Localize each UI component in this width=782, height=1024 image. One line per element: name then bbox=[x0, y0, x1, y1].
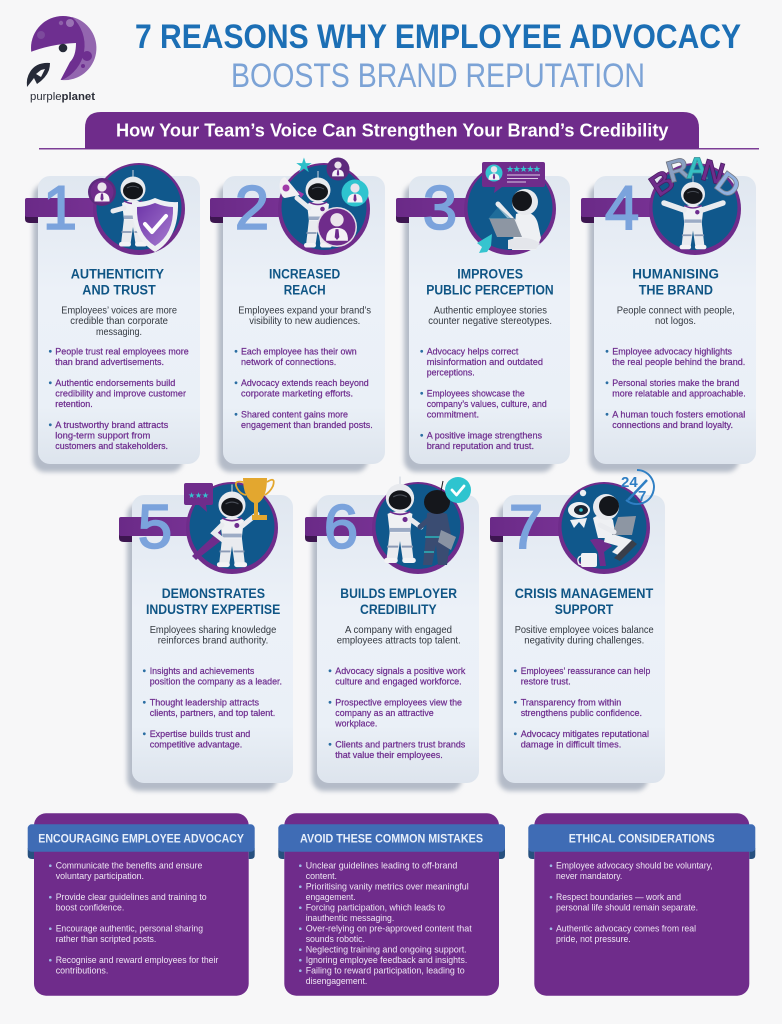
bullet list: Expertise builds trust and bbox=[150, 728, 250, 739]
logo: purpleplanet: purpleplanet bbox=[30, 91, 95, 103]
description: negativity during challenges. bbox=[524, 636, 644, 646]
bullet list: that value their employees. bbox=[335, 749, 443, 760]
heading: BUILDS EMPLOYER bbox=[340, 586, 457, 601]
heading: REACH bbox=[284, 282, 326, 297]
icon: astronaut with laptop and review bubble: ★★★★★ bbox=[506, 164, 541, 174]
heading: AND TRUST bbox=[82, 282, 157, 297]
icon: astronaut with laptop, robot and 24/7: 24 bbox=[621, 474, 638, 491]
bullet list: boost confidence. bbox=[56, 902, 124, 913]
panel: avoid these common mistakes bbox=[278, 813, 505, 996]
bullet list: Failing to reward participation, leading to bbox=[306, 965, 465, 976]
bullet list bbox=[514, 665, 650, 749]
description: messaging. bbox=[96, 327, 142, 338]
bullet list: Communicate the benefits and ensure bbox=[56, 860, 202, 871]
bullet list bbox=[235, 345, 373, 430]
number 5: 5 bbox=[138, 493, 172, 562]
title: BOOSTS BRAND REPUTATION bbox=[231, 57, 645, 95]
heading bbox=[426, 266, 554, 297]
bullet list: Thought leadership attracts bbox=[150, 696, 259, 707]
description: Positive employee voices balance bbox=[515, 625, 654, 636]
bullet list bbox=[299, 860, 472, 986]
icon: astronaut with BRAND letters: D bbox=[709, 164, 747, 206]
bullet list: sounds robotic. bbox=[306, 933, 365, 944]
icon: astronaut with laptop and review bubble bbox=[477, 162, 545, 253]
bullet list: Employees showcase the bbox=[427, 387, 525, 398]
bullet list: inauthentic messaging. bbox=[306, 912, 394, 923]
bullet list: competitive advantage. bbox=[150, 738, 242, 749]
bullet list: network of connections. bbox=[241, 356, 336, 367]
heading: INDUSTRY EXPERTISE bbox=[146, 602, 280, 617]
bullet list: than brand advertisements. bbox=[55, 356, 164, 367]
heading bbox=[71, 266, 164, 297]
heading: PUBLIC PERCEPTION bbox=[426, 282, 554, 297]
bullet list: commitment. bbox=[427, 408, 479, 419]
bullet list: Each employee has their own bbox=[241, 345, 357, 356]
bullet list: workplace. bbox=[334, 717, 377, 728]
icon: astronaut with BRAND letters: A bbox=[686, 150, 708, 186]
bullet list: People trust real employees more bbox=[55, 345, 189, 356]
heading bbox=[269, 266, 341, 297]
description: credible than corporate bbox=[70, 316, 168, 327]
number 3: 3 bbox=[423, 174, 457, 243]
heading: CREDIBILITY bbox=[360, 602, 437, 617]
heading: INCREASED bbox=[269, 266, 341, 282]
bullet list: Authentic endorsements build bbox=[55, 377, 175, 388]
bullet list: perceptions. bbox=[427, 366, 475, 377]
heading: HUMANISING bbox=[632, 266, 719, 282]
heading: IMPROVES bbox=[457, 266, 523, 282]
bullet list bbox=[420, 345, 547, 451]
bullet list: Employees’ reassurance can help bbox=[521, 665, 650, 676]
bullet list: company as an attractive bbox=[335, 707, 434, 718]
description: not logos. bbox=[655, 316, 696, 327]
bullet list: the real people behind the brand. bbox=[612, 356, 745, 367]
icon: astronaut with BRAND letters: N bbox=[697, 152, 729, 192]
panel: reason 3 improves public perception bbox=[396, 162, 570, 472]
bullet list bbox=[329, 665, 466, 760]
panel: ethical considerations bbox=[528, 813, 755, 996]
heading: THE BRAND bbox=[639, 282, 713, 297]
icon: astronaut shaking hands with robot bbox=[384, 477, 471, 565]
heading bbox=[146, 586, 280, 617]
icon: astronaut with laptop, robot and 24/7 bbox=[568, 470, 654, 567]
subtitle banner: How Your Team’s Voice Can Strengthen Your Brand’s Credibility bbox=[116, 120, 668, 140]
bullet list: Ignoring employee feedback and insights. bbox=[306, 954, 467, 965]
bullet list: Authentic advocacy comes from real bbox=[556, 923, 696, 934]
description bbox=[428, 305, 552, 327]
bullet list: engagement. bbox=[306, 891, 356, 902]
logo: purpleplanet bbox=[27, 16, 96, 103]
description: reinforces brand authority. bbox=[158, 636, 268, 646]
number 6: 6 bbox=[324, 493, 358, 562]
bullet list: personal life should remain separate. bbox=[556, 902, 698, 913]
bullet list: Advocacy mitigates reputational bbox=[521, 728, 649, 739]
bullet list: credibility and improve customer bbox=[55, 387, 186, 398]
panel: reason 4 humanising the brand bbox=[581, 150, 756, 472]
bullet list: Employee advocacy should be voluntary, bbox=[556, 860, 713, 871]
bullet list: pride, not pressure. bbox=[556, 933, 631, 944]
heading: DEMONSTRATES bbox=[162, 586, 265, 601]
description bbox=[515, 625, 654, 646]
heading bbox=[632, 266, 719, 297]
bullet list: Employee advocacy highlights bbox=[612, 345, 732, 356]
bullet list bbox=[143, 665, 282, 749]
bullet list: company’s values, culture, and bbox=[427, 398, 547, 409]
icon: astronaut with megaphone and people bbox=[280, 155, 368, 248]
bullet list: disengagement. bbox=[306, 975, 367, 986]
bullet list: restore trust. bbox=[521, 675, 571, 686]
description: Employees’ voices are more bbox=[61, 305, 177, 316]
bullet list: retention. bbox=[55, 398, 93, 409]
bullet list: Recognise and reward employees for their bbox=[56, 954, 218, 965]
bullet list: Unclear guidelines leading to off-brand bbox=[306, 860, 457, 871]
bullet list: Forcing participation, which leads to bbox=[306, 902, 445, 913]
description bbox=[617, 305, 735, 327]
bullet list: Advocacy extends reach beyond bbox=[241, 377, 369, 388]
bullet list: Respect boundaries — work and bbox=[556, 891, 681, 902]
panel: reason 5 demonstrates industry expertise bbox=[119, 478, 293, 791]
bullet list: Over-relying on pre-approved content that bbox=[306, 923, 472, 934]
bullet list: strengthens public confidence. bbox=[521, 707, 642, 718]
bullet list bbox=[550, 860, 713, 944]
subtitle banner bbox=[39, 112, 759, 150]
bullet list: Shared content gains more bbox=[241, 408, 348, 419]
number 4: 4 bbox=[605, 174, 639, 243]
icon: astronaut with BRAND letters: R bbox=[662, 150, 694, 190]
description bbox=[238, 305, 371, 327]
bullet list: A human touch fosters emotional bbox=[612, 408, 745, 419]
icon: astronaut with shield bbox=[88, 170, 178, 252]
description: employees attracts top talent. bbox=[337, 636, 461, 646]
bullet list: Personal stories make the brand bbox=[612, 377, 739, 388]
bullet list: Clients and partners trust brands bbox=[335, 738, 466, 749]
bullet list bbox=[606, 345, 746, 430]
bullet list: voluntary participation. bbox=[56, 870, 144, 881]
header: ENCOURAGING EMPLOYEE ADVOCACY bbox=[38, 832, 244, 845]
bullet list: A positive image strengthens bbox=[427, 429, 542, 440]
description: visibility to new audiences. bbox=[249, 316, 360, 327]
bullet list: A trustworthy brand attracts bbox=[55, 419, 169, 430]
bullet list: engagement than branded posts. bbox=[241, 419, 373, 430]
heading: SUPPORT bbox=[555, 602, 614, 617]
bullet list: customers and stakeholders. bbox=[55, 440, 168, 451]
description: Employees sharing knowledge bbox=[150, 625, 277, 636]
bullet list: contributions. bbox=[56, 965, 108, 976]
panel: reason 7 crisis management support bbox=[490, 470, 665, 791]
bullet list: Advocacy signals a positive work bbox=[335, 665, 466, 676]
bullet list: Provide clear guidelines and training to bbox=[56, 891, 207, 902]
bullet list: connections and brand loyalty. bbox=[612, 419, 733, 430]
icon: astronaut with trophy bbox=[184, 478, 274, 567]
panel: reason 6 builds employer credibility bbox=[305, 477, 479, 791]
description: A company with engaged bbox=[345, 625, 452, 636]
number 1: 1 bbox=[43, 174, 77, 243]
header: AVOID THESE COMMON MISTAKES bbox=[300, 832, 483, 845]
header: ETHICAL CONSIDERATIONS bbox=[569, 832, 715, 845]
bullet list: Transparency from within bbox=[521, 696, 621, 707]
bullet list: content. bbox=[306, 870, 337, 881]
bullet list: never mandatory. bbox=[556, 870, 622, 881]
title bbox=[135, 18, 741, 95]
bullet list: position the company as a leader. bbox=[150, 675, 282, 686]
description: counter negative stereotypes. bbox=[428, 316, 552, 327]
bullet list: Prioritising vanity metrics over meaningful bbox=[306, 881, 469, 892]
description: People connect with people, bbox=[617, 305, 735, 316]
bullet list: long-term support from bbox=[55, 429, 150, 440]
description bbox=[337, 625, 461, 646]
panel: encouraging employee advocacy bbox=[28, 813, 255, 996]
bullet list: Prospective employees view the bbox=[335, 696, 462, 707]
heading: CRISIS MANAGEMENT bbox=[515, 586, 654, 601]
heading bbox=[340, 586, 457, 617]
heading: AUTHENTICITY bbox=[71, 266, 164, 282]
bullet list: brand reputation and trust. bbox=[427, 440, 534, 451]
bullet list: damage in difficult times. bbox=[521, 738, 621, 749]
number 7: 7 bbox=[509, 493, 543, 562]
icon: astronaut with laptop, robot and 24/7: 7 bbox=[638, 488, 646, 505]
bullet list bbox=[49, 860, 218, 976]
bullet list: culture and engaged workforce. bbox=[335, 675, 462, 686]
bullet list: Advocacy helps correct bbox=[427, 345, 519, 356]
description bbox=[61, 305, 177, 338]
bullet list: Encourage authentic, personal sharing bbox=[56, 923, 203, 934]
icon: astronaut with trophy: ★★★ bbox=[188, 491, 209, 500]
bullet list bbox=[49, 345, 189, 451]
description bbox=[150, 625, 277, 646]
description: Employees expand your brand’s bbox=[238, 305, 371, 316]
bullet list: clients, partners, and top talent. bbox=[150, 707, 275, 718]
panel: reason 1 authenticity and trust bbox=[25, 163, 200, 472]
number 2: 2 bbox=[235, 174, 269, 243]
bullet list: more relatable and approachable. bbox=[612, 387, 746, 398]
heading bbox=[515, 586, 654, 617]
bullet list: Neglecting training and ongoing support. bbox=[306, 944, 467, 955]
bullet list: Insights and achievements bbox=[150, 665, 255, 676]
bullet list: misinformation and outdated bbox=[427, 356, 543, 367]
icon: astronaut with BRAND letters: B bbox=[643, 162, 681, 204]
panel: reason 2 increased reach bbox=[210, 155, 385, 472]
bullet list: corporate marketing efforts. bbox=[241, 387, 353, 398]
description: Authentic employee stories bbox=[434, 305, 547, 316]
icon: astronaut with BRAND letters bbox=[643, 150, 747, 249]
icon: astronaut with megaphone and people: ★ bbox=[295, 155, 313, 177]
bullet list: rather than scripted posts. bbox=[56, 933, 156, 944]
